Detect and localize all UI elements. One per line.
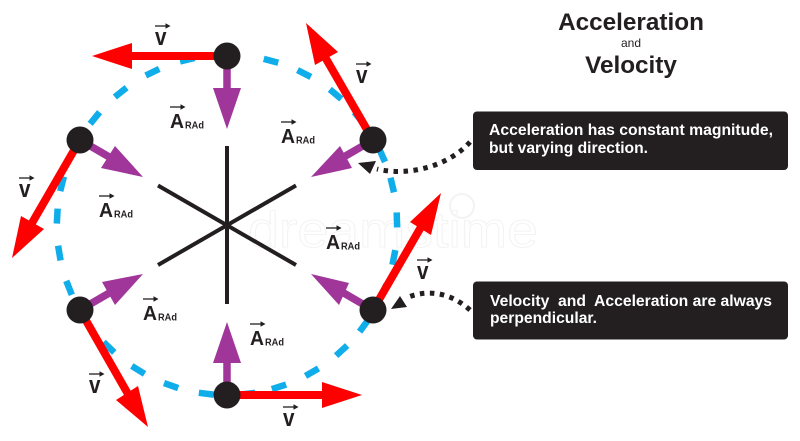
arrow: velocity upper right (306, 23, 373, 140)
acceleration label: lower left (143, 296, 177, 325)
callout: constant magnitude: Acceleration has constant magnitude, (489, 122, 773, 139)
acceleration label: upper right: A (281, 126, 295, 148)
velocity label: top: v (155, 24, 167, 51)
arrow: acceleration lower left (80, 274, 143, 310)
arrow: velocity bottom (227, 382, 362, 408)
arrow: acceleration upper left (80, 140, 143, 177)
velocity label: upper right: v (356, 62, 368, 89)
center spokes (158, 146, 296, 304)
acceleration label: lower right: RAd (341, 240, 360, 252)
velocity label: lower right: v (417, 258, 429, 285)
position nodes (66, 42, 386, 408)
acceleration label: lower right (326, 225, 360, 254)
velocity label: upper left: v (19, 176, 31, 203)
arrow: velocity top (92, 43, 227, 69)
arrow: acceleration lower right (311, 274, 373, 310)
velocity label: bottom: v (283, 405, 295, 432)
acceleration label: upper left (99, 193, 133, 222)
acceleration label: top: A (170, 111, 184, 133)
acceleration label: bottom (250, 321, 284, 350)
arrow: velocity lower left (80, 310, 148, 427)
callout: perpendicular: Velocity and Acceleration are always (490, 293, 772, 310)
arrow: velocity upper left (12, 140, 80, 258)
title (558, 9, 704, 79)
arrow: acceleration upper right (311, 140, 373, 177)
title: and (621, 36, 641, 50)
acceleration arrows (purple) (80, 56, 373, 395)
acceleration label: lower left: A (143, 303, 157, 325)
title: Velocity (585, 52, 677, 79)
acceleration label: upper left: RAd (114, 208, 133, 220)
acceleration label: upper right: RAd (296, 134, 315, 146)
callout: constant magnitude: but varying direction. (489, 140, 648, 157)
title: Acceleration (558, 9, 704, 36)
acceleration label: top: RAd (185, 120, 204, 132)
acceleration label: upper right (281, 119, 315, 148)
arrow: velocity lower right (373, 193, 441, 310)
arrow: acceleration top (213, 56, 241, 129)
dotted arrow: upper callout (358, 142, 470, 174)
dashed circular path (57, 58, 397, 395)
acceleration label: top (170, 104, 204, 133)
watermark: dreamstime (248, 202, 538, 258)
dotted arrow: lower callout (391, 293, 470, 310)
callout: perpendicular (473, 282, 788, 340)
arrow: acceleration bottom (213, 322, 241, 395)
acceleration label: lower right: A (326, 232, 340, 254)
acceleration label: bottom: A (250, 328, 264, 350)
velocity label: lower left: v (89, 372, 101, 399)
acceleration label: upper left: A (99, 200, 113, 222)
velocity arrows (red) (12, 23, 441, 427)
callout: perpendicular: perpendicular. (490, 310, 597, 327)
callout: constant magnitude (473, 112, 788, 170)
acceleration label: lower left: RAd (158, 312, 177, 324)
acceleration label: bottom: RAd (265, 336, 284, 348)
